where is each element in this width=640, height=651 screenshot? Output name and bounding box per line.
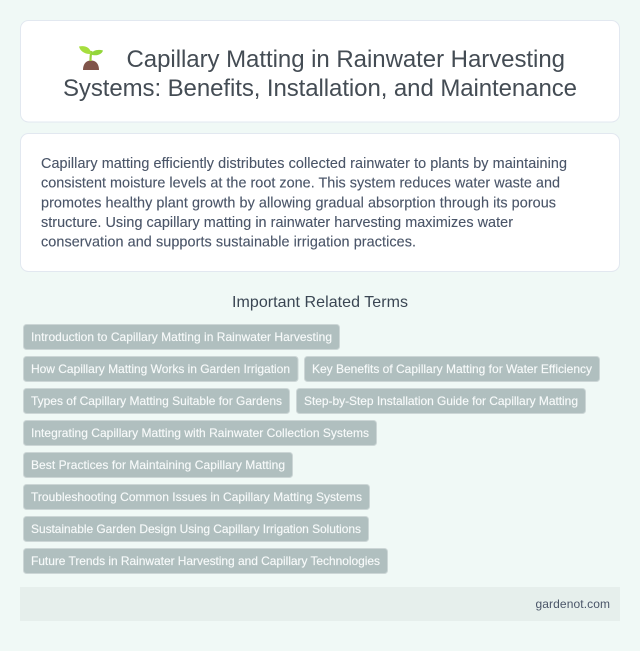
tag: Introduction to Capillary Matting in Rainwater Harvesting — [31, 330, 332, 344]
tag — [24, 324, 340, 350]
footer: gardenot.com — [536, 597, 610, 611]
tag: Future Trends in Rainwater Harvesting and Capillary Technologies — [31, 554, 380, 568]
footer — [20, 587, 620, 621]
description text: conservation and supports sustainable irrigation practices. — [41, 235, 416, 251]
tag: Key Benefits of Capillary Matting for Water Efficiency — [312, 362, 592, 376]
tag — [24, 484, 370, 510]
description text: structure. Using capillary matting in rainwater harvesting maximizes water — [41, 215, 513, 231]
panel: description card — [20, 134, 620, 272]
tag — [24, 420, 376, 446]
tag — [24, 516, 368, 542]
tag: How Capillary Matting Works in Garden Irrigation — [31, 362, 290, 376]
icon: seedling — [79, 46, 103, 70]
tag — [24, 388, 290, 414]
tag: Step-by-Step Installation Guide for Capillary Matting — [304, 394, 578, 408]
panel: related term tags — [24, 324, 600, 574]
title text: Capillary Matting in Rainwater Harvesting — [126, 46, 565, 73]
tag — [24, 356, 298, 382]
tag: Types of Capillary Matting Suitable for Gardens — [31, 394, 282, 408]
heading: related terms: Important Related Terms — [232, 294, 408, 311]
tag: Best Practices for Maintaining Capillary Matting — [31, 458, 285, 472]
description text: consistent moisture levels at the root zone. This system reduces water waste and — [41, 176, 560, 192]
tag: Sustainable Garden Design Using Capillary Irrigation Solutions — [31, 522, 361, 536]
tag — [296, 388, 586, 414]
tag — [304, 356, 600, 382]
tag — [24, 452, 292, 478]
title text: Systems: Benefits, Installation, and Maintenance — [63, 75, 577, 102]
description text — [41, 156, 567, 251]
description text: promotes healthy plant growth by allowing gradual absorption through its porous — [41, 195, 556, 211]
tag: Troubleshooting Common Issues in Capillary Matting Systems — [31, 490, 362, 504]
panel: title card — [20, 20, 620, 122]
tag — [24, 548, 388, 574]
title text — [63, 46, 577, 102]
description text: Capillary matting efficiently distributes collected rainwater to plants by maintaining — [41, 156, 567, 172]
tag: Integrating Capillary Matting with Rainwater Collection Systems — [31, 426, 369, 440]
